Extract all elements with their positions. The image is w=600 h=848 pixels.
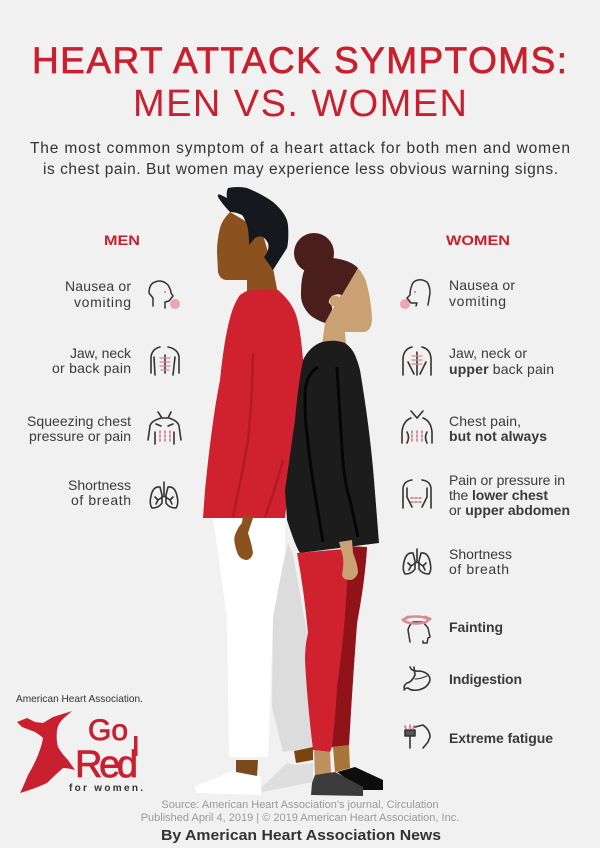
icon: men lungs: [150, 482, 178, 508]
logo: Go Red for Women: for women.: [69, 783, 143, 794]
women symptom labels: upper back pain: [449, 361, 554, 377]
men symptom labels: [27, 278, 132, 508]
icon: extreme fatigue: [405, 725, 430, 748]
women symptom labels: Jaw, neck or: [449, 345, 527, 361]
byline: By American Heart Association News: [161, 828, 441, 844]
source note: [141, 799, 459, 824]
title: [32, 40, 567, 125]
intro text: is chest pain. But women may experience less obvious warning signs.: [43, 161, 558, 178]
illustration: man: [195, 187, 313, 795]
icon: men back pain: [151, 347, 179, 375]
icon: indigestion: [404, 667, 430, 690]
women symptom labels: the lower chest: [449, 487, 548, 503]
women symptom labels: but not always: [449, 428, 547, 444]
icon: women lungs: [403, 549, 431, 574]
men symptom labels: pressure or pain: [29, 428, 131, 444]
women symptom labels: Pain or pressure in: [449, 472, 565, 488]
women symptom labels: of breath: [449, 561, 509, 577]
source note: Published April 4, 2019 | © 2019 American Heart Association, Inc.: [141, 812, 459, 824]
intro text: The most common symptom of a heart attack for both men and women: [30, 140, 570, 157]
source note: Source: American Heart Association's journal, Circulation: [161, 799, 439, 811]
men symptom labels: Jaw, neck: [70, 345, 132, 361]
title: HEART ATTACK SYMPTOMS:: [32, 40, 567, 81]
women symptom labels: vomiting: [449, 293, 506, 309]
men symptom labels: of breath: [71, 492, 131, 508]
women symptom labels: Shortness: [449, 546, 512, 562]
logo: Go Red for Women: Go: [88, 714, 128, 747]
men symptom labels: vomiting: [74, 294, 131, 310]
logo: Go Red for Women: Red: [75, 744, 138, 786]
women symptom labels: [449, 277, 570, 746]
icon: women back pain: [403, 347, 431, 375]
women symptom labels: Indigestion: [449, 671, 522, 687]
women symptom labels: Chest pain,: [449, 413, 521, 429]
men symptom labels: or back pain: [52, 360, 131, 376]
icon: women lower chest: [403, 480, 431, 508]
heading: men: MEN: [104, 233, 140, 248]
icon: men chest pressure: [148, 412, 181, 444]
icon: fainting: [403, 616, 430, 643]
title: MEN VS. WOMEN: [133, 83, 467, 125]
men symptom labels: Shortness: [68, 477, 131, 493]
icon: women nausea: [400, 280, 430, 309]
icon: women chest pain: [402, 411, 432, 443]
women symptom labels: or upper abdomen: [449, 502, 570, 518]
logo: Go Red for Women: [17, 711, 143, 794]
men symptom labels: Squeezing chest: [27, 413, 131, 429]
heading: women: WOMEN: [446, 233, 510, 248]
logo: American Heart Association: American Heart Association.: [16, 693, 143, 705]
women symptom labels: Nausea or: [449, 277, 515, 293]
men symptom labels: Nausea or: [65, 278, 131, 294]
intro text: [30, 140, 570, 178]
women symptom labels: Fainting: [449, 619, 503, 635]
icon: men nausea: [149, 281, 180, 309]
illustration: woman: [285, 233, 383, 796]
women symptom labels: Extreme fatigue: [449, 730, 553, 746]
